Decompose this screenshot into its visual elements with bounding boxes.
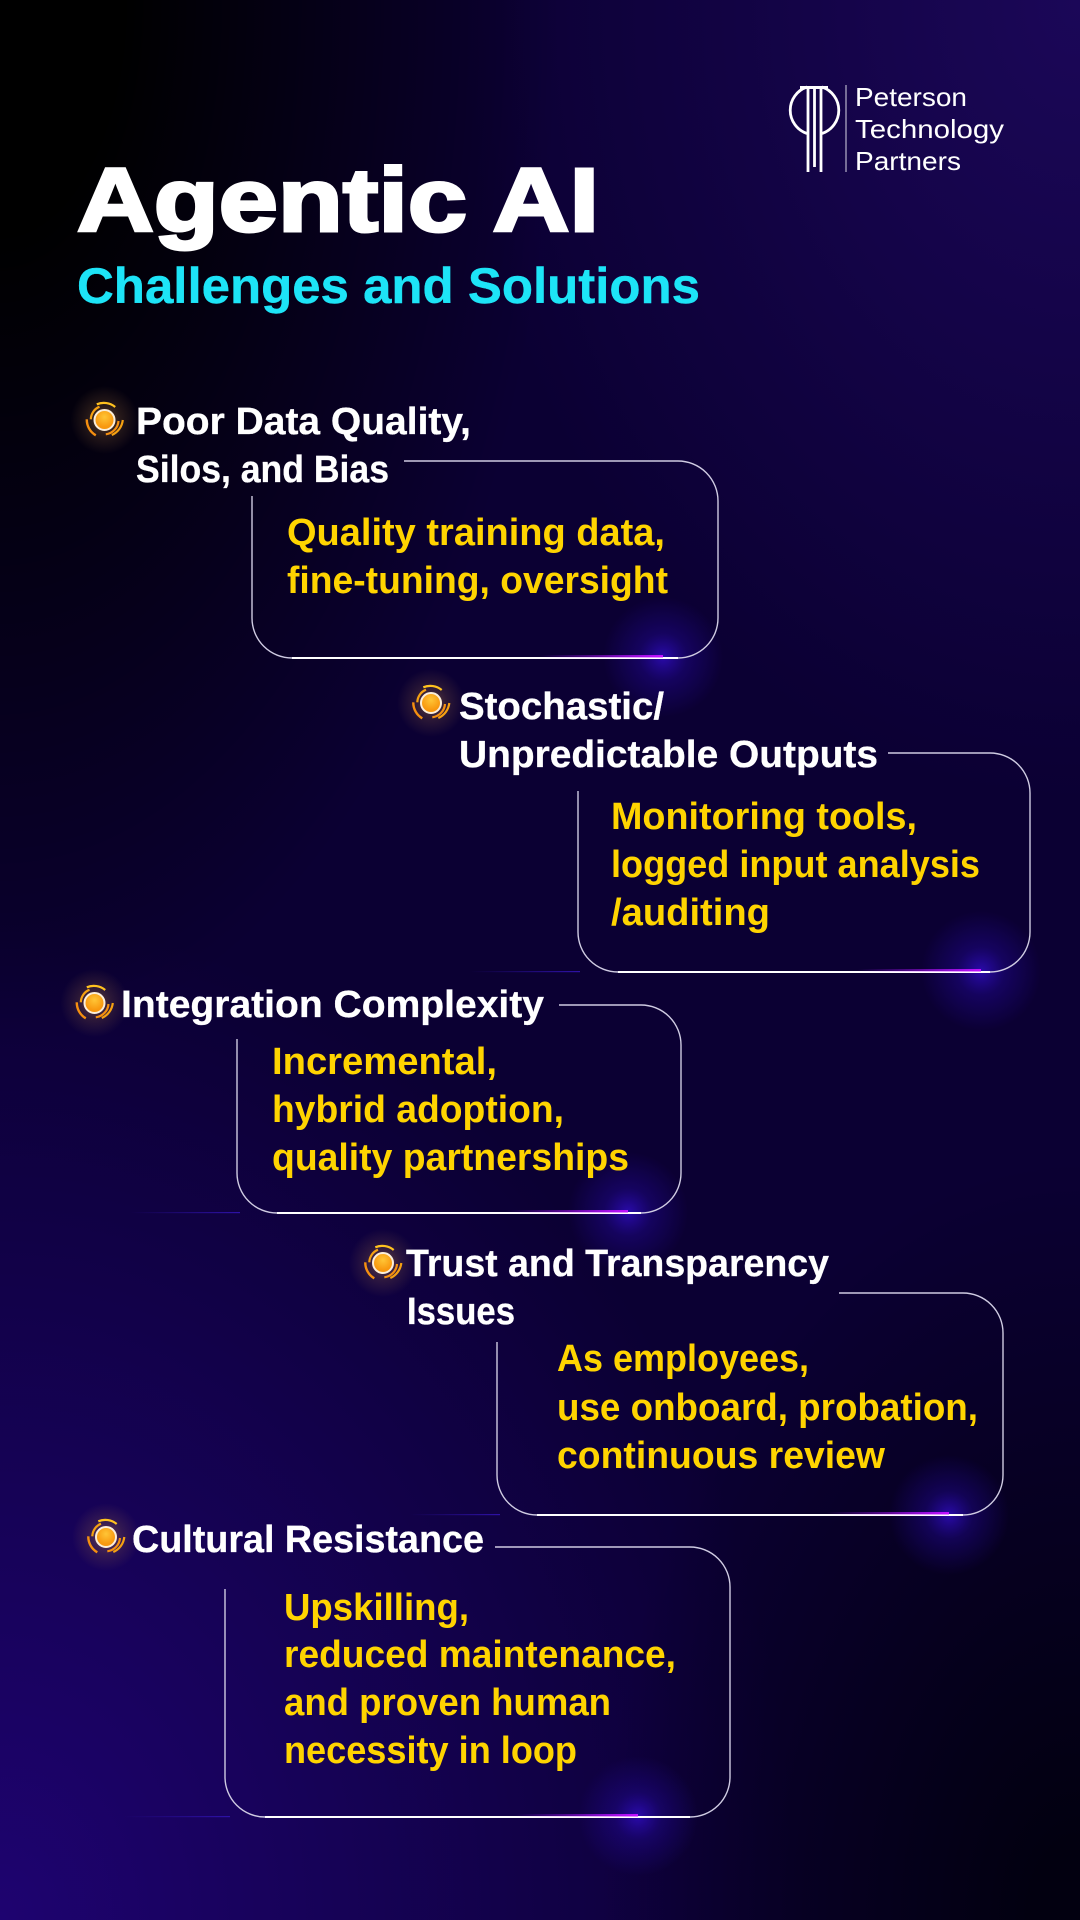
logo icon: pillar and circle mark [790, 87, 839, 172]
solution text: and proven human [284, 1682, 611, 1724]
card bottom highlight [292, 655, 678, 658]
card tail line [130, 1212, 240, 1213]
icon: orange pulse bullet [397, 669, 465, 737]
challenge heading: Poor Data Quality, [136, 401, 471, 443]
solution text: necessity in loop [284, 1730, 577, 1772]
card glow [568, 1152, 688, 1272]
subtitle: Challenges and Solutions [77, 258, 700, 314]
solution text [272, 1041, 629, 1179]
logo: Peterson Technology Partners [790, 82, 1004, 176]
card bottom highlight [277, 1210, 641, 1213]
solution text: use onboard, probation, [557, 1387, 978, 1429]
icon: orange pulse bullet [60, 969, 128, 1037]
challenge heading: Issues [407, 1291, 515, 1333]
solution text: As employees, [557, 1338, 809, 1380]
card glow [578, 1756, 698, 1876]
card outline [237, 1005, 681, 1213]
solution text [287, 512, 668, 602]
challenge heading [406, 1243, 829, 1333]
card outline [252, 461, 718, 658]
panel: integration complexity [60, 969, 688, 1272]
card tail line [410, 1514, 500, 1515]
logo divider [845, 85, 847, 172]
challenge heading: Stochastic/ [459, 686, 664, 728]
card bottom highlight [265, 1814, 690, 1817]
solution text: /auditing [611, 892, 770, 934]
solution text: hybrid adoption, [272, 1089, 564, 1131]
card bottom highlight [618, 969, 990, 972]
card bottom highlight [537, 1512, 963, 1515]
panel: poor data quality [70, 386, 723, 717]
panel: stochastic outputs [397, 669, 1041, 1031]
card tail line [125, 1816, 230, 1817]
solution text: reduced maintenance, [284, 1634, 676, 1676]
logo wordmark: Technology [855, 114, 1004, 144]
solution text: Quality training data, [287, 512, 665, 554]
challenge heading: Unpredictable Outputs [459, 734, 878, 776]
solution text: Upskilling, [284, 1587, 469, 1629]
challenge heading: Silos, and Bias [136, 449, 389, 491]
card outline [578, 753, 1030, 972]
solution text: fine-tuning, oversight [287, 560, 668, 602]
solution text [557, 1338, 978, 1477]
solution text: Incremental, [272, 1041, 497, 1083]
card glow [603, 597, 723, 717]
solution text [284, 1587, 676, 1772]
logo wordmark: Peterson [855, 82, 967, 112]
card outline [497, 1293, 1003, 1515]
card glow [921, 911, 1041, 1031]
challenge heading [459, 686, 878, 776]
card outline [225, 1547, 730, 1817]
challenge heading: Integration Complexity [121, 984, 544, 1026]
challenge heading: Trust and Transparency [406, 1243, 829, 1285]
challenge heading: Cultural Resistance [132, 1519, 484, 1561]
solution text: continuous review [557, 1435, 885, 1477]
icon: orange pulse bullet [70, 386, 138, 454]
solution text: logged input analysis [611, 844, 980, 886]
challenge heading [136, 401, 471, 491]
icon: orange pulse bullet [72, 1503, 140, 1571]
solution text: Monitoring tools, [611, 796, 917, 838]
card glow [889, 1455, 1009, 1575]
solution text: quality partnerships [272, 1137, 629, 1179]
panel: cultural resistance [72, 1503, 730, 1876]
card tail line [470, 971, 580, 972]
solution text [611, 796, 980, 934]
panel: trust and transparency [349, 1229, 1009, 1575]
icon: orange pulse bullet [349, 1229, 417, 1297]
logo wordmark: Partners [855, 146, 961, 176]
logo wordmark [855, 82, 1004, 176]
title: Agentic AI [77, 151, 599, 251]
